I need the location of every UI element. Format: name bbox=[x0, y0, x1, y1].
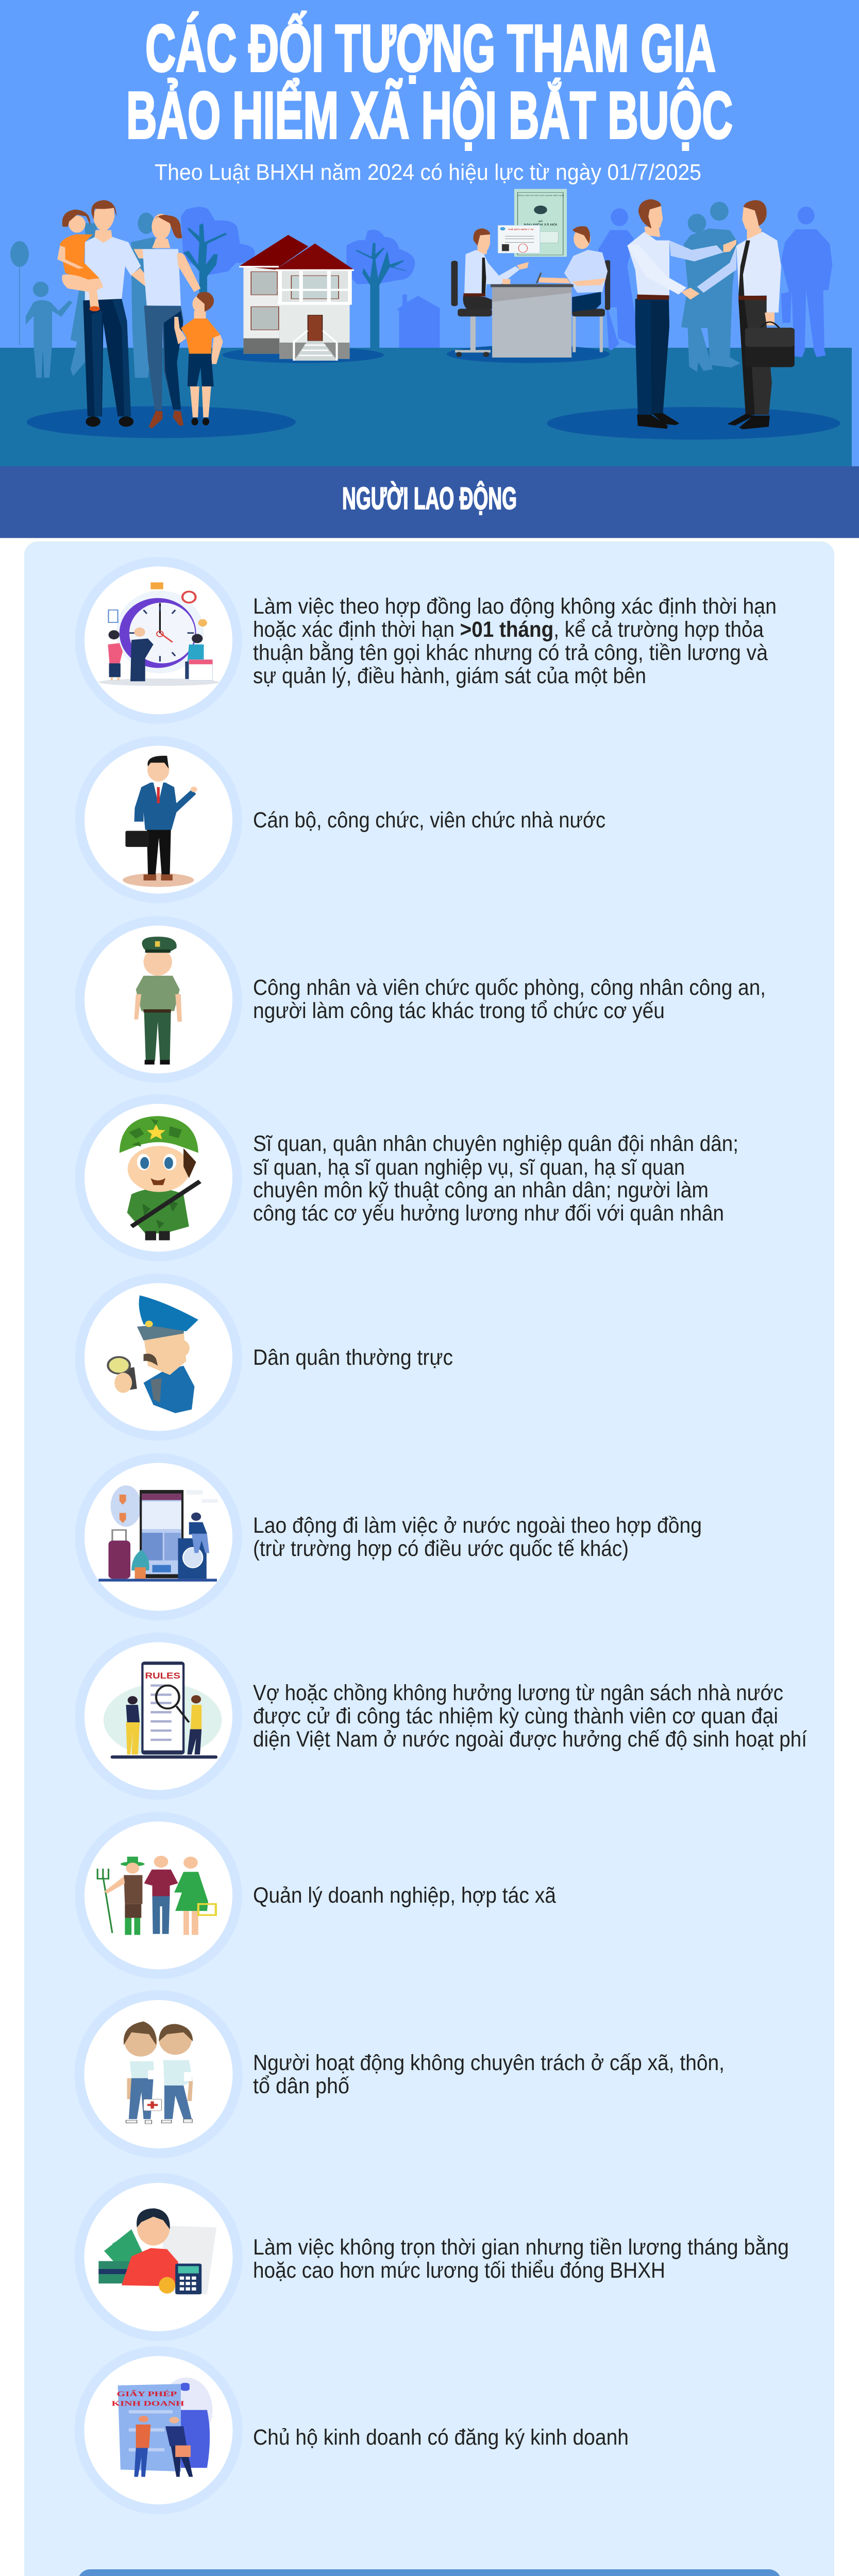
text bbox=[253, 594, 777, 688]
icon: rules on phone: RULES bbox=[145, 1671, 180, 1681]
text: Làm việc theo hợp đồng lao động không xác định thời hạn bbox=[253, 594, 777, 619]
social insurance book and card: BẢO HIỂM XÃ HỘI bbox=[524, 223, 558, 226]
desk bbox=[491, 284, 574, 358]
businessman left bbox=[627, 199, 736, 429]
item 9: non-specialised workers bbox=[74, 1990, 725, 2158]
icon: civil servant bbox=[123, 756, 197, 887]
text: Cán bộ, công chức, viên chức nhà nước bbox=[253, 808, 605, 833]
icon: uniformed worker bbox=[134, 937, 182, 1064]
text: hoặc xác định thời hạn >01 tháng, kể cả trường hợp thỏa bbox=[253, 617, 764, 642]
house bbox=[239, 235, 354, 361]
text: sự quản lý, điều hành, giám sát của một bên bbox=[253, 664, 646, 688]
text: Dân quân thường trực bbox=[253, 1345, 453, 1370]
text: Lao động đi làm việc ở nước ngoài theo hợp đồng bbox=[253, 1513, 702, 1538]
text: chuyên môn kỹ thuật công an nhân dân; người làm bbox=[253, 1178, 709, 1202]
callout: foreign workers bbox=[78, 2569, 781, 2576]
boy bbox=[174, 292, 223, 426]
item 11: household business bbox=[74, 2346, 629, 2514]
panel: người lao động bbox=[24, 541, 834, 2576]
social insurance book and card: CỘNG HÒA XÃ HỘI CHỦ NGHĨA VIỆT NAM bbox=[517, 195, 564, 196]
icon: business licence: GIẤY PHÉP bbox=[117, 2389, 177, 2398]
item 3: defence workers bbox=[75, 916, 766, 1083]
icon: two health volunteers bbox=[124, 2022, 193, 2124]
subtitle: Theo Luật BHXH năm 2024 có hiệu lực từ ngày 01/7/2025 bbox=[155, 160, 701, 185]
text bbox=[253, 2235, 789, 2283]
section header: người lao động: NGƯỜI LAO ĐỘNG bbox=[342, 481, 517, 516]
seated man right bbox=[536, 226, 610, 352]
text: Chủ hộ kinh doanh có đăng ký kinh doanh bbox=[253, 2425, 629, 2450]
item 10: part-time workers bbox=[74, 2173, 789, 2341]
icon: business licence: KINH DOANH bbox=[111, 2399, 184, 2407]
text: Công nhân và viên chức quốc phòng, công nhân công an, bbox=[253, 975, 766, 1000]
text: Người hoạt động không chuyên trách ở cấp xã, thôn, bbox=[253, 2050, 725, 2075]
icon: phone, travel bbox=[98, 1485, 218, 1582]
icon: clock and people bbox=[98, 582, 219, 686]
text: công tác cơ yếu hưởng lương như đối với quân nhân bbox=[253, 1201, 724, 1226]
icon: rules on phone bbox=[104, 1662, 222, 1759]
text bbox=[253, 1131, 738, 1226]
illustration: family and house bbox=[26, 200, 440, 438]
icon: guard with flashlight bbox=[108, 1295, 198, 1413]
handshake bbox=[681, 287, 700, 300]
icon: business licence bbox=[111, 2378, 212, 2477]
social insurance book and card bbox=[498, 189, 567, 257]
illustration: office and handshake bbox=[447, 189, 840, 439]
text: hoặc cao hơn mức lương tối thiểu đóng BHXH bbox=[253, 2258, 665, 2283]
text: thuận bằng tên gọi khác nhưng có trả công, tiền lương và bbox=[253, 640, 768, 665]
balloon silhouette bbox=[10, 241, 29, 345]
social insurance book and card: SỔ bbox=[538, 219, 543, 223]
text: diện Việt Nam ở nước ngoài được hưởng chế độ sinh hoạt phí bbox=[253, 1727, 807, 1752]
seated man left bbox=[451, 228, 529, 357]
title bbox=[126, 11, 733, 152]
text bbox=[253, 975, 766, 1023]
icon: chibi soldier bbox=[120, 1116, 200, 1240]
text bbox=[253, 2050, 725, 2098]
text: tổ dân phố bbox=[253, 2074, 349, 2098]
text: Quản lý doanh nghiệp, hợp tác xã bbox=[253, 1883, 556, 1908]
text: người làm công tác khác trong tổ chức cơ yếu bbox=[253, 998, 665, 1023]
item 2: officials bbox=[75, 736, 605, 903]
item 4: military officers bbox=[75, 1094, 738, 1261]
item 8: managers bbox=[75, 1812, 556, 1979]
text: (trừ trường hợp có điều ước quốc tế khác) bbox=[253, 1536, 629, 1561]
hero banner bbox=[0, 0, 859, 466]
section header: người lao động bbox=[0, 466, 859, 538]
man and girl bbox=[57, 200, 148, 427]
icon: three farmers bbox=[97, 1856, 216, 1935]
text: được cử đi công tác nhiệm kỳ cùng thành viên cơ quan đại bbox=[253, 1704, 778, 1728]
social insurance book and card: THẺ BẢO HIỂM Y TẾ bbox=[508, 229, 534, 230]
text bbox=[253, 1681, 807, 1752]
businessman right with briefcase bbox=[697, 200, 795, 429]
text: Làm việc không trọn thời gian nhưng tiền lương tháng bằng bbox=[253, 2235, 789, 2260]
item 5: militia bbox=[75, 1274, 453, 1440]
item 1: indefinite contract bbox=[75, 557, 777, 724]
icon: money and calculator bbox=[98, 2208, 216, 2294]
text: Sĩ quan, quân nhân chuyên nghiệp quân đội nhân dân; bbox=[253, 1131, 738, 1156]
text: sĩ quan, hạ sĩ quan nghiệp vụ, sĩ quan, hạ sĩ quan bbox=[253, 1155, 685, 1180]
item 7: spouses bbox=[75, 1633, 807, 1800]
text bbox=[253, 1513, 702, 1561]
woman bbox=[133, 214, 200, 429]
text: Vợ hoặc chồng không hưởng lương từ ngân sách nhà nước bbox=[253, 1681, 783, 1705]
item 6: overseas workers bbox=[75, 1453, 702, 1620]
